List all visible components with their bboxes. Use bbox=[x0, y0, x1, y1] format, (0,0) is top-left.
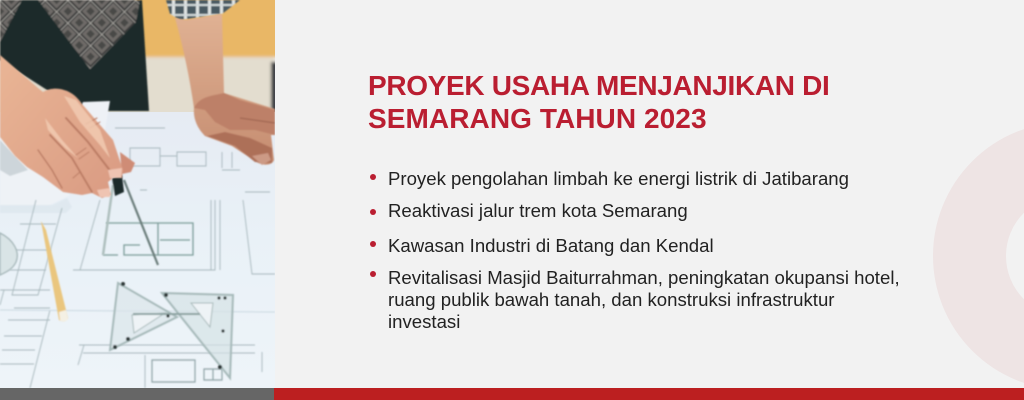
left hand bbox=[0, 55, 135, 198]
back wall and wood bbox=[0, 0, 280, 125]
footer bar: red segment bbox=[274, 388, 1024, 400]
title bbox=[368, 70, 829, 134]
floor plan bbox=[103, 223, 193, 255]
footer bar: grey segment bbox=[0, 388, 274, 400]
blueprint paper bbox=[0, 112, 275, 388]
list item 4: Revitalisasi Masjid Baiturrahman, peningkatan okupansi hotel, bbox=[388, 267, 900, 288]
title: SEMARANG TAHUN 2023 bbox=[368, 102, 707, 134]
title: PROYEK USAHA MENJANJIKAN DI bbox=[368, 70, 829, 101]
right arm and hand bbox=[175, 14, 275, 165]
blueprint linework bbox=[0, 128, 275, 388]
list item 2: Reaktivasi jalur trem kota Semarang bbox=[388, 200, 688, 221]
list item 1: Proyek pengolahan limbah ke energi listrik di Jatibarang bbox=[388, 168, 849, 189]
list item 4 bbox=[370, 267, 900, 332]
decorative ring bbox=[933, 130, 1024, 383]
loose paper sheets bbox=[0, 101, 110, 213]
list item 4: investasi bbox=[388, 311, 460, 332]
list item 4: ruang publik bawah tanah, dan konstruksi infrastruktur bbox=[388, 289, 835, 310]
list item 3: Kawasan Industri di Batang dan Kendal bbox=[388, 235, 714, 256]
photo: architect working on blueprints bbox=[0, 0, 275, 388]
shirt and sleeves bbox=[0, 0, 240, 111]
compass bbox=[103, 175, 158, 265]
round protractor bbox=[0, 233, 17, 275]
pencil bbox=[41, 221, 68, 321]
set squares bbox=[110, 282, 233, 378]
